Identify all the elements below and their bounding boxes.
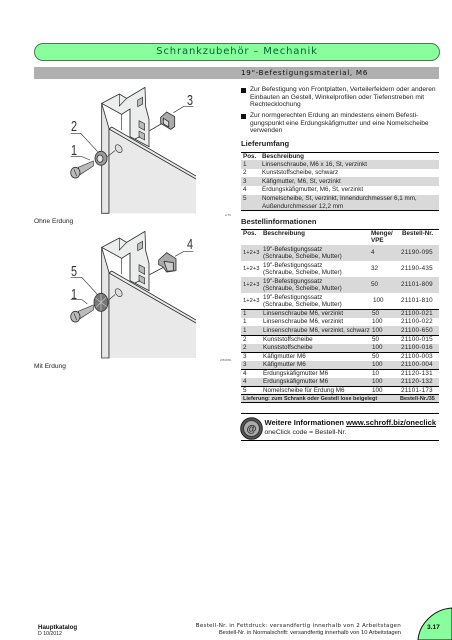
- text: 21101-173: [401, 386, 433, 394]
- panel: [109, 271, 196, 358]
- table: scope of delivery: [241, 152, 439, 211]
- text: Bestell-Nr.: [402, 230, 433, 236]
- text: 4: [243, 370, 247, 376]
- subtitle: 19"-Befestigungsmaterial, M6: [241, 68, 368, 77]
- text: Außendurchmesser 12,2 mm: [262, 202, 343, 210]
- text: Zur normgerechten Erdung an mindestens einem Befesti-: [250, 112, 418, 119]
- footer delivery note: Bestell-Nr. in Fettdruck: versandfertig innerhalb von 2 Arbeitstagen: [196, 623, 401, 629]
- text: 2: [243, 336, 247, 342]
- text: 100: [372, 344, 383, 351]
- text: 1: [243, 310, 247, 316]
- text: 19"-Befestigungssatz: [263, 246, 322, 252]
- part 1: screw: [71, 300, 93, 322]
- text: 5: [243, 386, 247, 394]
- text: Pos.: [243, 230, 256, 236]
- oneClick note: oneClick code = Bestell-Nr.: [264, 429, 346, 436]
- icon: oneClick badge: [240, 417, 263, 440]
- icon: oneClick badge: @: [247, 424, 257, 434]
- text: 4: [243, 378, 247, 385]
- caption: Ohne Erdung: Ohne Erdung: [34, 218, 73, 225]
- text: 50: [371, 281, 378, 288]
- part 5: serrated washer: [71, 278, 115, 312]
- text: Kunststoffscheibe, schwarz: [262, 169, 338, 176]
- text: 21100-015: [401, 336, 433, 342]
- table: order information: [241, 229, 439, 403]
- text: 2: [243, 344, 247, 351]
- text: 3: [243, 352, 247, 360]
- text: 10: [372, 370, 379, 376]
- caption: Mit Erdung: Mit Erdung: [34, 363, 66, 370]
- text: (Schraube, Scheibe, Mutter): [263, 253, 342, 260]
- tiny image code 2: 26564851: [220, 359, 232, 362]
- tiny image code 1: er.59: [225, 214, 231, 217]
- text: 21100-022: [401, 318, 433, 325]
- text: VPE: [371, 237, 384, 244]
- text: 21100-016: [401, 344, 433, 351]
- text: 4: [187, 236, 193, 253]
- text: 2: [70, 118, 77, 135]
- text: Einbauten an Gestell, Winkelprofilen oder Tiefenstreben mit: [250, 94, 424, 101]
- text: Bestell-Nr./35: [400, 396, 435, 402]
- text: Kunststoffscheibe: [263, 344, 313, 351]
- text: 21120-131: [401, 370, 433, 376]
- footer left: catalogue: [38, 624, 77, 636]
- text: Kunststoffscheibe: [263, 336, 313, 342]
- text: 21100-650: [401, 326, 433, 334]
- grey subtitle bar: [34, 67, 439, 79]
- text: 100: [372, 326, 383, 334]
- text: 19"-Befestigungssatz: [263, 278, 322, 284]
- text: 19"-Befestigungssatz: [263, 294, 322, 300]
- text: verwenden: [250, 127, 282, 134]
- part 2: washer: [71, 133, 115, 165]
- text: Linsenschraube M6, verzinkt: [263, 318, 343, 325]
- part 3: cage nut: [135, 106, 193, 139]
- text: 21101-810: [401, 297, 433, 304]
- oneClick heading: Weitere Informationen www.schroff.biz/oneclick: [264, 418, 436, 426]
- text: (Schraube, Scheibe, Mutter): [263, 269, 342, 276]
- text: 1: [71, 286, 77, 302]
- text: Beschreibung: [263, 230, 305, 236]
- part 4: grounding cage nut: [135, 252, 193, 283]
- text: 100: [373, 297, 384, 304]
- footer left: catalogue: Hauptkatalog: [38, 624, 77, 631]
- text: Erdungskäfigmutter, M6, St, verzinkt: [262, 186, 363, 193]
- text: 1: [243, 318, 247, 325]
- callout numbers: bottom illustration: [71, 236, 193, 302]
- footer left: catalogue: D 10/2012: [38, 630, 62, 636]
- text: (Schraube, Scheibe, Mutter): [263, 285, 342, 292]
- text: Rechtecklochung: [250, 101, 301, 108]
- text: 1+2+3: [243, 266, 259, 272]
- page number: 3.17: [427, 624, 440, 631]
- text: 100: [372, 386, 383, 394]
- text: gungspunkt eine Erdungskäfigmutter und eine Nomelscheibe: [250, 120, 429, 127]
- bullet list: [241, 86, 436, 134]
- text: 50: [372, 352, 379, 360]
- text: 21100-021: [401, 310, 433, 316]
- text: Linsenschraube, M6 x 16, St, verzinkt: [262, 160, 367, 168]
- text: 4: [371, 249, 375, 256]
- text: 100: [372, 361, 383, 368]
- heading: Lieferumfang: Lieferumfang: [241, 139, 289, 148]
- text: Menge/: [371, 230, 393, 236]
- text: 3: [243, 361, 247, 368]
- text: 4: [243, 186, 247, 193]
- text: 3: [243, 178, 247, 184]
- text: Nomelscheibe für Erdung M6: [263, 386, 345, 394]
- rack profile: [102, 232, 149, 358]
- text: 1+2+3: [243, 282, 259, 288]
- panel: [109, 127, 196, 213]
- footer delivery note: [196, 623, 401, 636]
- text: 5: [243, 195, 247, 202]
- oneClick info box: [241, 413, 439, 441]
- text: Käfigmutter, M6, St, verzinkt: [262, 178, 341, 184]
- heading: Bestellinformationen: Bestellinformationen: [241, 216, 317, 226]
- text: 21190-435: [401, 265, 433, 272]
- text: Käfigmutter M6: [263, 361, 306, 368]
- text: 19"-Befestigungssatz: [263, 262, 322, 268]
- header pill: [34, 43, 440, 61]
- callout numbers: top illustration: [70, 92, 193, 158]
- text: Erdungskäfigmutter M6: [263, 370, 328, 376]
- text: 1: [243, 326, 247, 334]
- text: 100: [372, 378, 383, 385]
- text: (Schraube, Scheibe, Mutter): [263, 301, 342, 308]
- illustration: without grounding: [70, 86, 196, 214]
- text: 50: [372, 310, 379, 316]
- rack profile: [102, 87, 149, 213]
- title: Schrankzubehör – Mechanik: [156, 46, 318, 57]
- text: 1+2+3: [243, 298, 259, 304]
- text: 21120-132: [401, 378, 433, 385]
- text: 21100-004: [401, 361, 433, 368]
- text: Lieferung: zum Schrank oder Gestell lose beigelegt: [243, 396, 377, 402]
- text: Käfigmutter M6: [263, 352, 306, 360]
- text: Erdungskäfigmutter M6: [263, 378, 328, 385]
- text: 1: [71, 142, 77, 158]
- text: 1+2+3: [243, 250, 259, 256]
- text: 32: [371, 265, 378, 272]
- text: 2: [243, 169, 247, 176]
- page tab: [418, 608, 452, 640]
- text: 21101-809: [401, 281, 433, 288]
- text: 5: [71, 262, 77, 280]
- text: Linsenschraube M6, verzinkt, schwarz: [263, 326, 370, 334]
- text: Zur Befestigung von Frontplatten, Verteilerfeldern oder anderen: [250, 86, 436, 93]
- footer delivery note: Bestell-Nr. in Normalschrift: versandfertig innerhalb von 10 Arbeitstagen: [219, 630, 401, 636]
- text: 21190-095: [401, 249, 433, 256]
- text: 50: [372, 336, 379, 342]
- illustration: with grounding: [70, 230, 196, 358]
- text: Pos.: [243, 153, 256, 160]
- text: 1: [243, 160, 247, 168]
- text: Beschreibung: [262, 153, 304, 160]
- text: Nomelscheibe, St, verzinkt, Innendurchmesser 6,1 mm,: [262, 194, 417, 202]
- part 1: screw: [71, 157, 93, 178]
- text: 3: [187, 92, 193, 108]
- text: Linsenschraube M6, verzinkt: [263, 310, 343, 316]
- text: 21100-003: [401, 352, 433, 360]
- text: 100: [372, 318, 383, 325]
